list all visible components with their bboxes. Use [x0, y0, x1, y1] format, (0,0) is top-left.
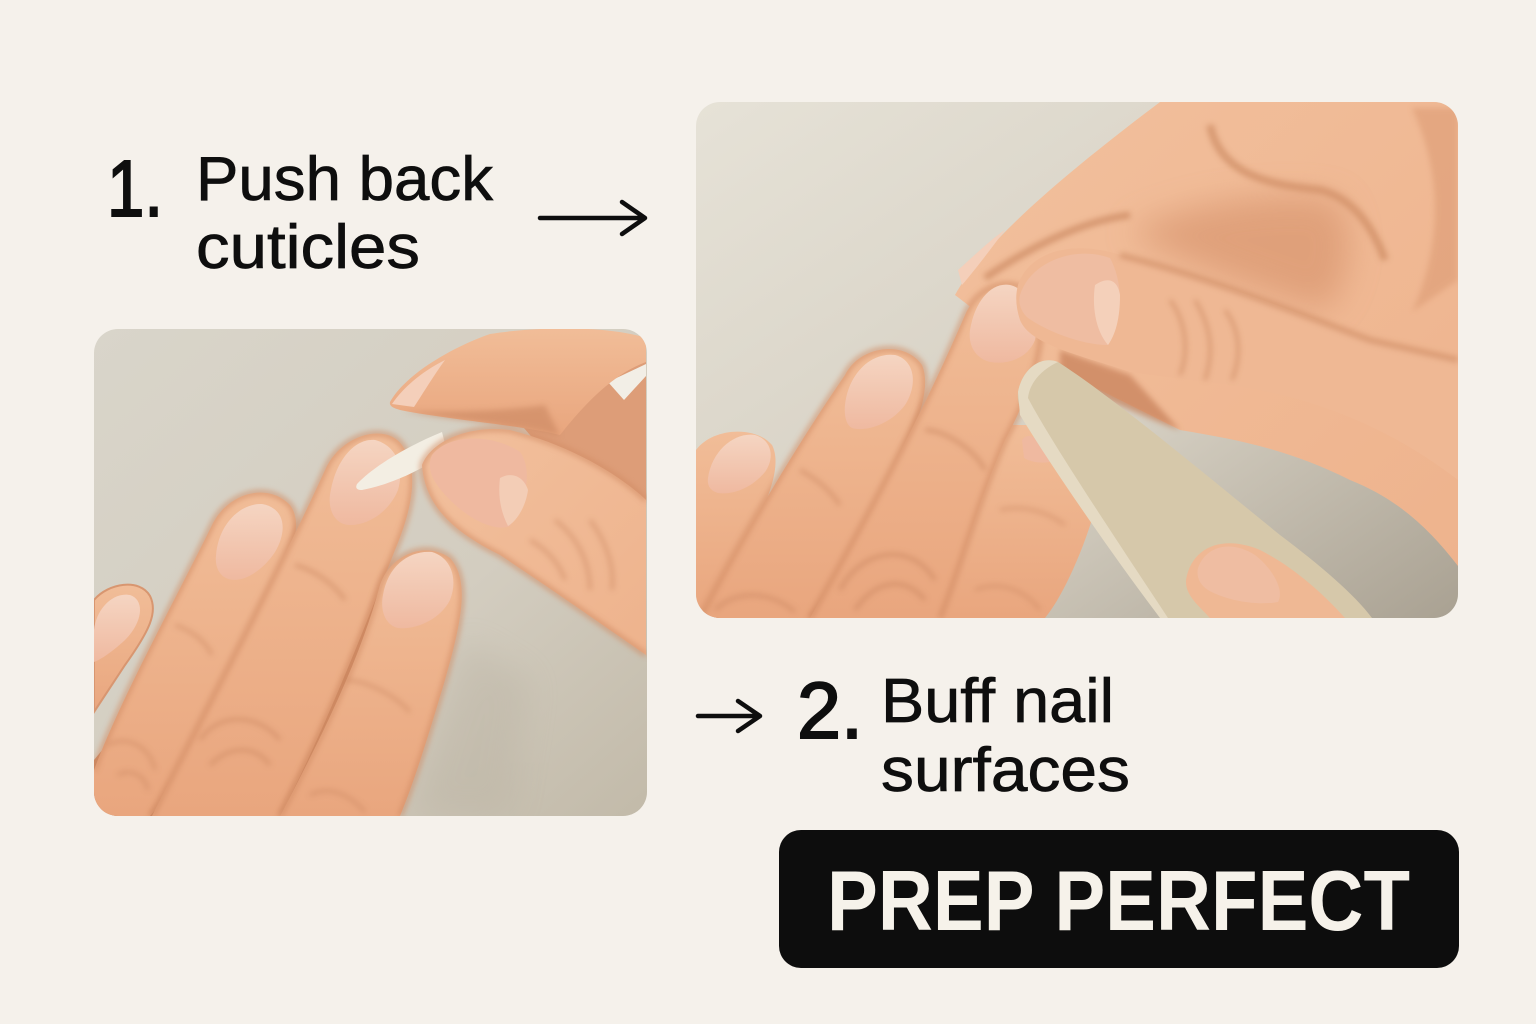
upper finger [390, 328, 646, 436]
step 2 number: 2. [797, 666, 863, 755]
step 2 label: surfaces [881, 736, 1130, 805]
ring finger [94, 493, 296, 816]
middle finger [152, 433, 412, 816]
panel: buffing photo illustration [696, 102, 1458, 618]
left finger [696, 432, 776, 618]
step 1 heading [107, 144, 494, 282]
pinky finger [94, 585, 153, 712]
fingers base shade [94, 596, 377, 816]
arrow: to step 2 [698, 701, 760, 731]
step 1 label: cuticles [196, 213, 420, 282]
finger shadow [456, 678, 498, 770]
step 1 number: 1. [107, 144, 163, 233]
lower fingers [696, 349, 1095, 618]
panel: cuticle photo illustration [94, 328, 647, 816]
far finger behind file [930, 425, 1095, 618]
step 1 label: Push back [196, 145, 494, 214]
back of hand [524, 362, 646, 500]
step 2 heading [797, 666, 1130, 805]
nail file [1018, 360, 1372, 618]
fingers base shade [702, 610, 719, 618]
badge: prep perfect [779, 830, 1459, 968]
infographic canvas [94, 102, 1459, 968]
thumb [1016, 252, 1458, 380]
badge text: PREP PERFECT [827, 854, 1410, 949]
orange stick tool [356, 432, 447, 490]
hand palm and fingers [955, 102, 1458, 566]
second finger [700, 349, 925, 618]
third finger [810, 284, 1041, 618]
fingertip on file [1186, 543, 1345, 618]
arrow: step 1 to buffing photo [540, 202, 645, 234]
thumb [422, 429, 646, 655]
index finger [280, 550, 462, 816]
step 2 label: Buff nail [881, 667, 1114, 736]
